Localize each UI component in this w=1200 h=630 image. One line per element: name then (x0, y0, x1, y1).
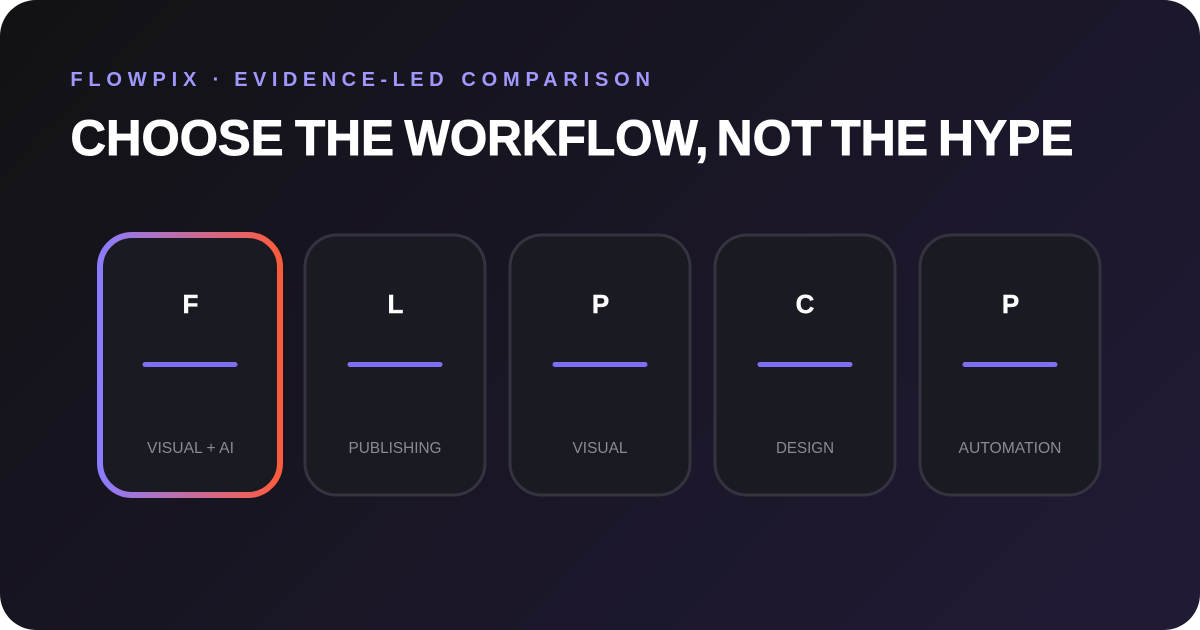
title: THE (295, 110, 394, 166)
title: WORKFLOW, (404, 110, 708, 166)
card: visual: P (592, 289, 609, 319)
card: Flowpix, highlighted (100, 235, 280, 495)
card: publishing (305, 235, 485, 495)
card: publishing: L (388, 289, 404, 319)
eyebrow label: FLOWPIX (70, 69, 202, 91)
card: visual: VISUAL (572, 440, 628, 457)
card: automation (920, 235, 1100, 495)
card: publishing: PUBLISHING (348, 440, 442, 457)
card: automation: P (1002, 289, 1019, 319)
card: Flowpix, highlighted: F (183, 289, 198, 319)
eyebrow label: · (213, 69, 219, 91)
card: visual (510, 235, 690, 495)
title: NOT (716, 110, 822, 166)
eyebrow label: EVIDENCE-LED (234, 69, 449, 91)
title: CHOOSE (70, 110, 284, 166)
card: design: C (796, 289, 815, 319)
eyebrow label: COMPARISON (461, 69, 656, 91)
card: Flowpix, highlighted: VISUAL + AI (147, 440, 234, 457)
card: design (715, 235, 895, 495)
card: design: DESIGN (776, 440, 834, 457)
card: automation: AUTOMATION (958, 440, 1062, 457)
title: THE (831, 110, 928, 166)
title: HYPE (938, 110, 1074, 166)
